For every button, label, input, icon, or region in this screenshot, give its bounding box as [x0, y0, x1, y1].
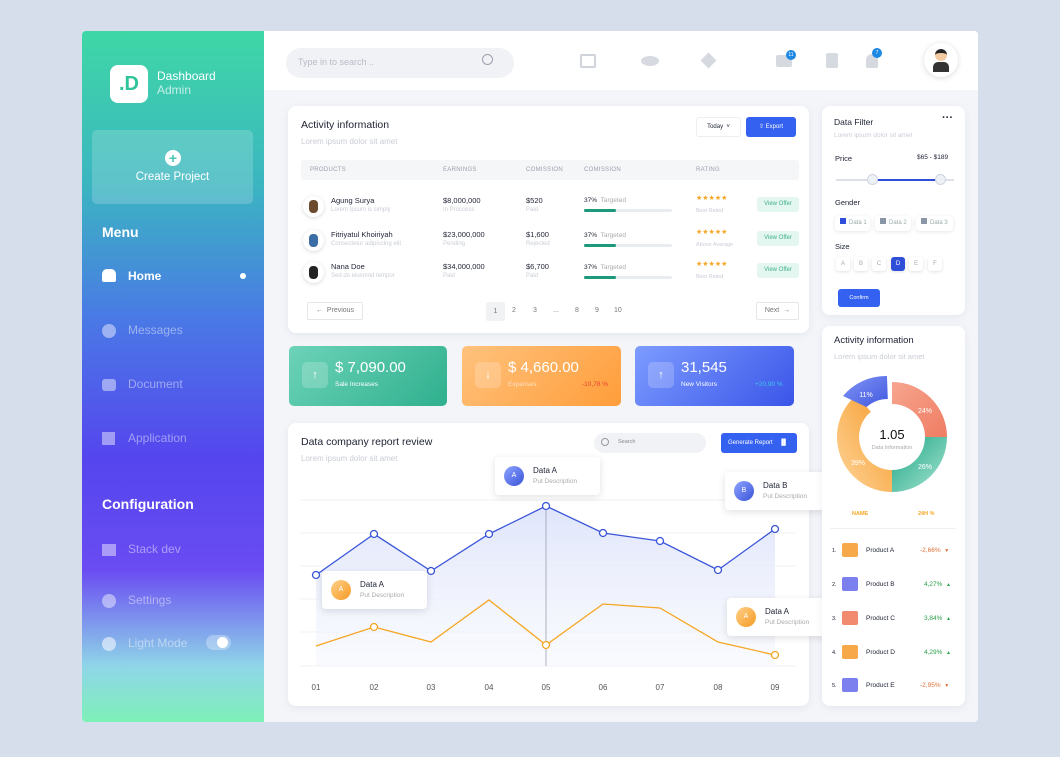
panel: activity information table: Activity information [301, 119, 389, 131]
row 2: $23,000,000 [443, 230, 485, 239]
panel: data company report review [288, 423, 809, 706]
generate report button [721, 433, 797, 453]
panel: data filter: F [933, 261, 937, 267]
today dropdown [696, 117, 741, 137]
logo: Admin [157, 83, 191, 97]
product list: Product E [866, 682, 895, 689]
panel: activity information donut: 24H % [918, 511, 935, 517]
pagination: ... [553, 307, 559, 314]
mail icon with badge: 11 [788, 52, 794, 58]
panel: data company report review: Data company report review [301, 436, 432, 448]
panel: activity information donut: Lorem ipsum dolor sit amet [834, 352, 924, 361]
callout: data A top: Put Description [533, 478, 577, 485]
nav: document: Document [128, 377, 183, 391]
stat card: sales: $ 7,090.00 [335, 359, 406, 376]
avatar [924, 43, 958, 77]
panel: activity information donut: NAME [852, 511, 868, 517]
stat card: expenses [462, 346, 621, 406]
row 2: Above Avarage [696, 242, 733, 248]
product list: 4. [832, 650, 837, 656]
stat card: expenses: $ 4,660.00 [508, 359, 579, 376]
row 2: Consectetur adipiscing elit [331, 241, 401, 247]
nav: home [102, 269, 246, 283]
product list: 2. [832, 582, 837, 588]
row 3: Best Rated [696, 274, 723, 280]
panel: data filter: Data Filter [834, 117, 873, 127]
callout: data A top [495, 457, 600, 495]
stat card: visitors: New Visitors [681, 381, 717, 388]
row 2: 37% Targeted [584, 232, 626, 239]
row 2: View Offer [764, 235, 792, 241]
panel: activity information donut: Activity information [834, 335, 914, 346]
pagination: 1 [494, 308, 497, 315]
confirm button [838, 289, 880, 307]
callout: data A left: Put Description [360, 592, 404, 599]
line chart: 05 [542, 683, 551, 692]
pagination: 3 [533, 307, 537, 314]
donut chart: 39% [851, 460, 865, 467]
panel: data filter: ··· [942, 112, 953, 124]
stat card: expenses: ↓ [485, 369, 491, 381]
header icons [580, 54, 596, 68]
callout: data A right [727, 598, 831, 636]
light mode toggle [102, 635, 231, 651]
logo [110, 65, 216, 103]
row 2 [302, 229, 799, 254]
row 1: Agung Surya [331, 196, 374, 205]
today dropdown: Today ˅ [707, 124, 730, 130]
panel: activity information donut [822, 326, 965, 706]
line chart: 03 [427, 683, 436, 692]
create project button: + [169, 150, 177, 166]
product list: 4,27% ▲ [924, 581, 951, 588]
line chart: 01 [312, 683, 321, 692]
nav: document [102, 377, 183, 391]
row 3: $6,700 [526, 262, 549, 271]
row 2: ★★★★★ [696, 229, 727, 236]
row 1: Best Rated [696, 208, 723, 214]
price slider [836, 179, 954, 181]
row 1: Paid [526, 207, 538, 213]
stat card: expenses: -10,78 % [582, 381, 608, 388]
donut chart: 26% [918, 464, 932, 471]
panel: data filter: Data 2 [889, 220, 907, 226]
pagination [307, 302, 799, 321]
product list: 4,29% ▲ [924, 649, 951, 656]
stat card: visitors: +20,90 % [755, 381, 783, 388]
panel: data filter: B [859, 261, 863, 267]
row 2: Fitriyatul Khoiriyah [331, 230, 393, 239]
row 3 [302, 261, 799, 286]
search box: Type in to search .. [298, 57, 374, 67]
logo: Dashboard [157, 69, 216, 83]
export button: ⇧ Export [759, 124, 783, 130]
product list: Product B [866, 581, 895, 588]
row 2: Pending [443, 241, 465, 247]
callout: data B: Put Description [763, 493, 807, 500]
stat card: expenses: Expenses [508, 381, 537, 388]
row 3: View Offer [764, 267, 792, 273]
menu heading: Menu [102, 224, 139, 240]
callout: data A left [322, 571, 427, 609]
product list: 3. [832, 616, 837, 622]
product list: Product C [866, 615, 895, 622]
nav: application: Application [128, 431, 187, 445]
stat card: sales: ↑ [312, 369, 318, 381]
product list: 1. [832, 548, 837, 554]
product list [832, 543, 951, 692]
logo: .D [119, 73, 139, 95]
row 1: $520 [526, 196, 543, 205]
pagination: 9 [595, 307, 599, 314]
donut chart: 1.05 [879, 427, 905, 442]
table header: PRODUCTS [310, 167, 346, 173]
stat card: sales: Sale Increases [335, 381, 378, 388]
panel: data filter: Lorem ipsum dolor sit amet [834, 132, 912, 139]
search box [286, 48, 514, 78]
row 3: Paid [443, 273, 455, 279]
product list: -2,66% ▼ [920, 547, 949, 554]
table header: COMISSION [526, 167, 563, 173]
line chart: 09 [771, 683, 780, 692]
row 1: 37% Targeted [584, 197, 626, 204]
table header: COMISSION [584, 167, 621, 173]
donut chart: Data Information [872, 445, 912, 451]
configuration heading: Configuration [102, 496, 194, 512]
nav: settings: Settings [128, 593, 171, 607]
stat card: visitors: 31,545 [681, 359, 727, 376]
product list: 3,84% ▲ [924, 615, 951, 622]
line chart: 06 [599, 683, 608, 692]
row 1: Lorem Ipsum is simply [331, 207, 391, 213]
panel: data company report review: Lorem ipsum dolor sit amet [301, 454, 397, 463]
size selectors: A [841, 261, 845, 267]
nav: stack dev [102, 542, 181, 556]
donut chart: 11% [859, 392, 873, 399]
panel: data filter: Data 3 [930, 220, 948, 226]
panel: data filter: Gender [835, 198, 860, 207]
light mode toggle: Light Mode [128, 636, 187, 650]
bell icon with badge [866, 54, 878, 68]
callout: data B [725, 472, 829, 510]
donut chart [837, 376, 947, 492]
row 1: $8,000,000 [443, 196, 481, 205]
export button [746, 117, 796, 137]
nav: home: Home [128, 269, 161, 283]
pagination: ← Previous [316, 307, 354, 314]
row 3: Paid [526, 273, 538, 279]
callout: data A right: A [744, 613, 748, 620]
dashboard frame [82, 31, 978, 722]
nav: settings [102, 593, 171, 608]
callout: data A left: Data A [360, 580, 384, 589]
stat card: sales [289, 346, 447, 406]
pagination: 8 [575, 307, 579, 314]
panel: data filter: C [877, 261, 881, 267]
nav: messages [102, 323, 183, 338]
callout: data A top: Data A [533, 466, 557, 475]
row 3: 37% Targeted [584, 264, 626, 271]
row 3: $34,000,000 [443, 262, 485, 271]
gender chips [835, 216, 870, 231]
callout: data B: B [742, 487, 746, 494]
search field: Search [618, 439, 635, 445]
panel: data filter: E [914, 261, 918, 267]
panel: data filter: D [896, 261, 900, 267]
header bar: 7 [876, 50, 878, 56]
row 3: Nana Doe [331, 262, 365, 271]
row 1: In Proccess [443, 207, 474, 213]
row 1 [302, 195, 799, 220]
stat card: visitors: ↑ [658, 369, 664, 381]
panel: data filter [822, 106, 965, 315]
callout: data A top: A [512, 472, 516, 479]
mail icon with badge [776, 55, 792, 67]
sidebar [82, 31, 264, 722]
size selectors [836, 257, 850, 271]
search field [594, 433, 706, 453]
pagination: Next → [765, 307, 790, 314]
line chart: 08 [714, 683, 723, 692]
table header [301, 160, 799, 180]
line chart: 07 [656, 683, 665, 692]
gender chips: Data 1 [849, 220, 867, 226]
product list: -2,95% ▼ [920, 682, 949, 689]
nav: stack dev: Stack dev [128, 542, 181, 556]
line chart [300, 500, 795, 692]
callout: data A right: Data A [765, 607, 789, 616]
row 2: $1,600 [526, 230, 549, 239]
row 2: Rejected [526, 241, 550, 247]
generate report button: Generate Report ▐▌ [728, 440, 788, 446]
panel: data filter: Price [835, 154, 852, 163]
callout: data B: Data B [763, 481, 787, 490]
row 1: ★★★★★ [696, 195, 727, 202]
product list: 5. [832, 683, 837, 689]
row 1: View Offer [764, 201, 792, 207]
line chart: 04 [485, 683, 494, 692]
callout: data A right: Put Description [765, 619, 809, 626]
panel: data filter: $65 - $189 [917, 154, 948, 161]
header bar [264, 31, 978, 90]
nav: messages: Messages [128, 323, 183, 337]
panel: activity information table: Lorem ipsum dolor sit amet [301, 137, 397, 146]
stat card: visitors [635, 346, 794, 406]
panel: activity information table [288, 106, 809, 333]
pagination: 2 [512, 307, 516, 314]
row 3: Sed do eiusmod tempor [331, 273, 395, 279]
panel: data filter: Size [835, 242, 850, 251]
product list: Product D [866, 649, 895, 656]
line chart: 02 [370, 683, 379, 692]
pagination: 10 [614, 307, 622, 314]
nav: application [102, 431, 187, 445]
product list: Product A [866, 547, 894, 554]
create project button: Create Project [136, 171, 209, 183]
row 3: ★★★★★ [696, 261, 727, 268]
create project button [92, 130, 253, 204]
confirm button: Confirm [849, 295, 869, 301]
callout: data A left: A [339, 586, 343, 593]
table header: EARNINGS [443, 167, 477, 173]
donut chart: 24% [918, 408, 932, 415]
table header: RATING [696, 167, 720, 173]
